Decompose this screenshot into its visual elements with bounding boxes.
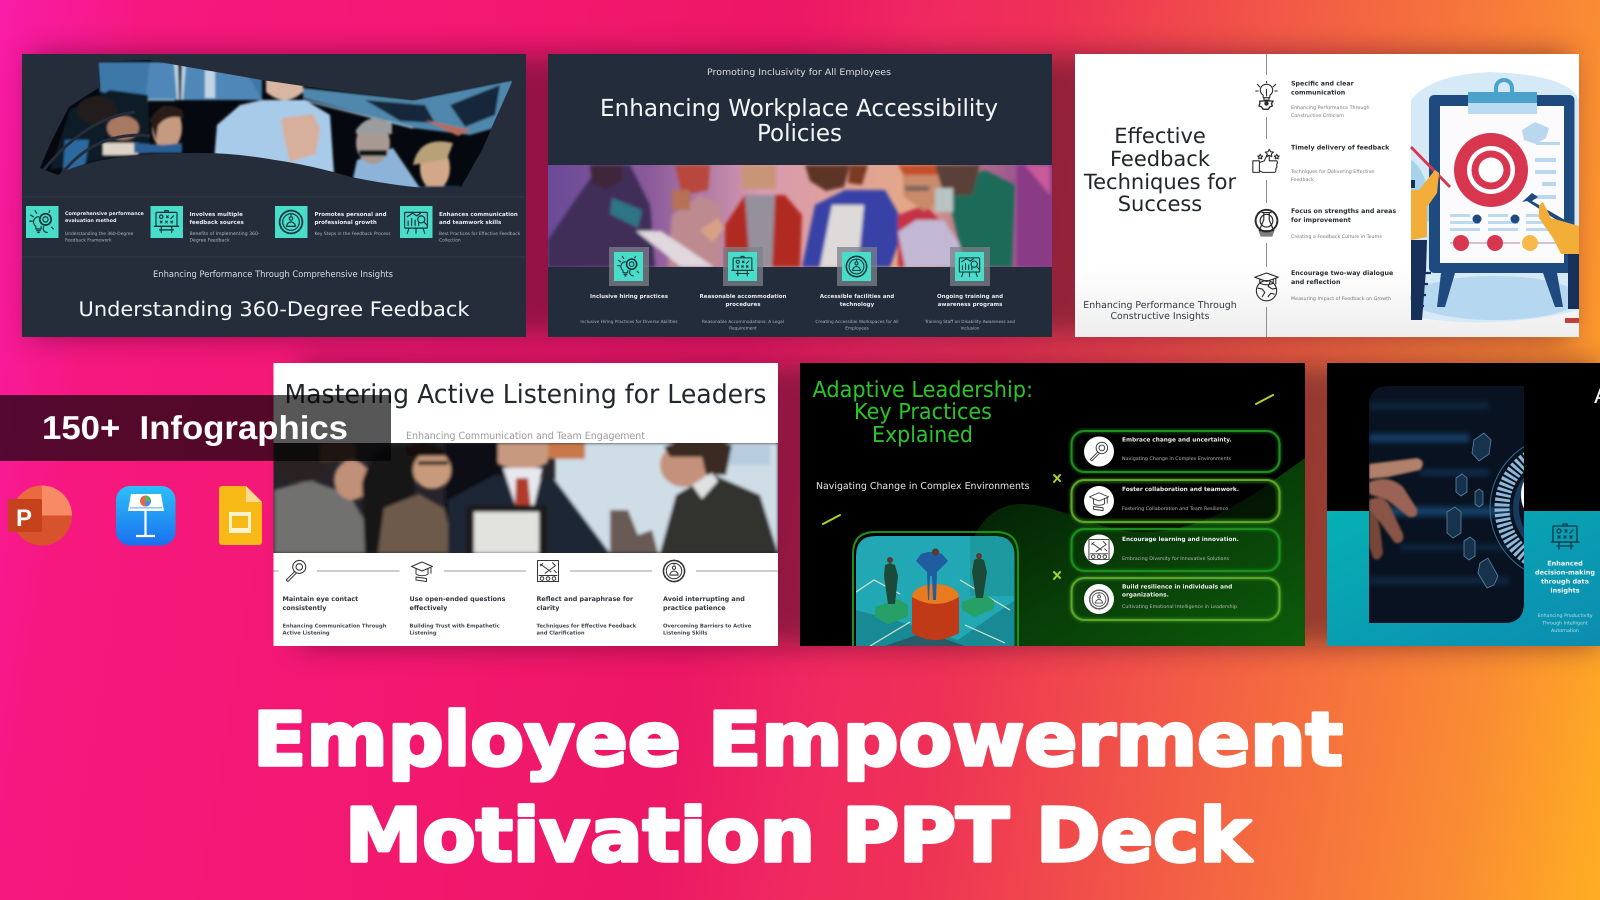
item 4: Avoid interrupting and <box>663 595 745 603</box>
item 2 <box>700 247 787 332</box>
photo: leaders talking <box>272 439 778 555</box>
insight column: Through Intelligent <box>1541 620 1588 626</box>
hand <box>1369 458 1423 560</box>
insight column: through data <box>1541 578 1589 586</box>
item 2: Reasonable Accommodations: A Legal <box>702 319 784 325</box>
item 3 <box>536 560 637 636</box>
pill 3 <box>1072 529 1280 571</box>
slide 3 title: Success <box>1118 192 1202 216</box>
icon: PowerPoint: P <box>16 505 32 532</box>
item 1: Constructive Criticism <box>1291 113 1344 119</box>
item 4: Collection <box>439 238 461 244</box>
slide 5 title <box>812 378 1033 448</box>
banner: 150+ Infographics: 150+ Infographics <box>42 409 348 446</box>
banner: 150+ Infographics <box>0 395 391 461</box>
item 4 <box>1255 270 1393 302</box>
item 3 <box>275 206 391 238</box>
insight column <box>1535 524 1595 634</box>
slide 4: active listening <box>272 363 778 646</box>
main title <box>253 697 1343 879</box>
item 1 <box>26 206 145 244</box>
slide 5: adaptive leadership <box>800 363 1305 646</box>
item 1: Understanding the 360-Degree <box>65 231 134 237</box>
item 1: Active Listening <box>282 630 330 636</box>
pill 1: Navigating Change in Complex Environments <box>1122 456 1231 462</box>
slide 5 title: Key Practices <box>854 400 992 425</box>
technique items <box>1253 80 1396 302</box>
item 3: Promotes personal and <box>314 211 387 218</box>
item 3: Key Steps in the Feedback Process <box>314 231 391 237</box>
slide 1: 360-degree feedback <box>22 54 526 337</box>
item 3: Focus on strengths and areas <box>1291 208 1396 215</box>
photo ribbon <box>40 60 513 188</box>
slide 4 title: Mastering Active Listening for Leaders <box>284 380 766 410</box>
item 4 <box>400 206 521 244</box>
item 3 <box>1256 208 1396 240</box>
item 3: for improvement <box>1291 217 1351 224</box>
pill 3: Embracing Diversity for Innovative Solutions <box>1122 556 1230 562</box>
item 3: Creating a Feedback Culture in Teams <box>1291 234 1382 240</box>
insight column: Automation <box>1551 628 1579 634</box>
hexagon icons <box>1447 433 1498 588</box>
item 1: Feedback Framework <box>65 238 112 244</box>
slide 3 title: Effective <box>1114 124 1206 148</box>
item 4 <box>663 560 752 636</box>
item 4: Enhances communication <box>439 211 518 218</box>
item 2 <box>150 206 260 244</box>
item 4: Measuring Impact of Feedback on Growth <box>1291 296 1391 302</box>
photo: hand and digital wheel <box>1369 386 1524 623</box>
slide 4 subtitle: Enhancing Communication and Team Engagement <box>406 431 645 442</box>
icon: Google Slides <box>219 486 262 545</box>
slide 3 subtitle: Enhancing Performance Through <box>1083 300 1237 311</box>
slide 2 title: Policies <box>757 119 842 147</box>
pill 4: organizations. <box>1122 592 1169 598</box>
item 2: Feedback <box>1291 177 1314 183</box>
accessibility items <box>580 247 1015 332</box>
item 4: awareness programs <box>938 302 1003 308</box>
icon: Keynote <box>116 486 176 546</box>
item 1: communication <box>1291 90 1345 96</box>
item 1 <box>1256 80 1370 119</box>
item 3: professional growth <box>314 219 377 226</box>
slide 6: intelligent automation <box>1327 363 1600 646</box>
pill 3: Encourage learning and innovation. <box>1122 536 1239 543</box>
item 2: Timely delivery of feedback <box>1291 144 1390 152</box>
feedback items row <box>26 206 521 244</box>
pill 4: Cultivating Emotional Intelligence in Leadership <box>1122 604 1237 610</box>
insight column: Enhanced <box>1547 560 1583 568</box>
item 4: Ongoing training and <box>937 293 1003 300</box>
item 2: Degree Feedback <box>190 238 230 244</box>
item 1: Inclusive Hiring Practices for Diverse Abilities <box>580 319 678 325</box>
photo: diverse employees <box>548 165 1052 267</box>
practice pills <box>1072 431 1280 620</box>
pill 1 <box>1072 431 1280 472</box>
item 2: Requirement <box>729 326 757 332</box>
listening items <box>274 560 778 636</box>
item 2 <box>1253 144 1390 183</box>
item 4 <box>924 247 1015 332</box>
slide 3 subtitle: Constructive Insights <box>1111 311 1210 322</box>
item 1: Enhancing Communication Through <box>282 624 387 630</box>
item 4: Inclusion <box>960 326 980 332</box>
item 3: Creating Accessible Workspaces for All <box>815 319 899 325</box>
slide 5 subtitle: Navigating Change in Complex Environments <box>816 481 1030 492</box>
item 2: Reasonable accommodation <box>700 293 787 300</box>
pill 1: Embrace change and uncertainty. <box>1122 436 1232 444</box>
slide 5 title: Explained <box>872 423 973 448</box>
illustration: target on clipboard <box>1410 72 1580 323</box>
main title: Motivation PPT Deck <box>345 793 1253 879</box>
pill 2: Fostering Collaboration and Team Resilience <box>1122 506 1228 512</box>
item 2: procedures <box>726 301 761 308</box>
item 1: evaluation method <box>65 218 117 224</box>
slide 3 title: Techniques for <box>1083 170 1236 194</box>
item 2: Use open-ended questions <box>410 595 506 603</box>
item 4: Overcoming Barriers to Active <box>663 624 752 630</box>
item 4: and reflection <box>1291 279 1340 286</box>
icon: PowerPoint <box>8 486 72 546</box>
slide 5 title: Adaptive Leadership: <box>812 378 1033 403</box>
insight column: Enhancing Productivity <box>1537 613 1593 619</box>
pill 2 <box>1072 480 1280 522</box>
item 3 <box>815 247 899 332</box>
item 1: Enhancing Performance Through <box>1291 105 1370 111</box>
item 1 <box>580 247 678 325</box>
slide 2: workplace accessibility <box>548 54 1052 337</box>
item 3: and Clarification <box>536 630 585 636</box>
item 4: Best Practices for Effective Feedback <box>439 231 521 237</box>
item 1: Comprehensive performance <box>65 211 145 217</box>
decorations <box>823 395 1273 579</box>
slide 3 title <box>1083 124 1236 216</box>
item 3: Accessible facilities and <box>820 293 894 300</box>
slide 3: effective feedback techniques <box>1075 54 1580 337</box>
slide 3 subtitle <box>1083 300 1237 322</box>
slide 2 title: Enhancing Workplace Accessibility <box>600 94 998 122</box>
item 4: Training Staff on Disability Awareness and <box>924 319 1015 325</box>
slide 1 subtitle: Enhancing Performance Through Comprehensive Insights <box>153 270 393 280</box>
item 4: Listening Skills <box>663 630 707 636</box>
item 1: Inclusive hiring practices <box>590 293 669 300</box>
item 1: Specific and clear <box>1291 80 1355 88</box>
slide 1 title: Understanding 360-Degree Feedback <box>78 297 470 321</box>
slide 2 title <box>600 94 998 147</box>
item 2: Building Trust with Empathetic <box>410 624 500 630</box>
slide shadows <box>30 54 1600 646</box>
pill 2: Foster collaboration and teamwork. <box>1122 486 1239 493</box>
pill 4 <box>1072 578 1280 620</box>
insight column: decision-making <box>1535 569 1595 577</box>
item 1: consistently <box>282 604 327 612</box>
item 3: clarity <box>536 604 560 612</box>
item 4: Encourage two-way dialogue <box>1291 270 1393 277</box>
item 3: Techniques for Effective Feedback <box>536 624 637 630</box>
slide 3 title: Feedback <box>1110 147 1211 171</box>
insight column: insights <box>1550 587 1580 595</box>
item 4: and teamwork skills <box>439 219 502 226</box>
item 4: practice patience <box>663 604 726 612</box>
photo: leader on podium <box>853 532 1018 646</box>
item 2: Listening <box>410 630 437 636</box>
item 1 <box>282 560 387 636</box>
item 2: feedback sources <box>190 219 244 226</box>
item 3: Employees <box>845 326 870 332</box>
slide 2 subtitle: Promoting Inclusivity for All Employees <box>707 68 891 78</box>
item 3: Reflect and paraphrase for <box>536 595 634 603</box>
item 2: Techniques for Delivering Effective <box>1290 169 1374 175</box>
item 2: effectively <box>410 604 448 612</box>
main title: Employee Empowerment <box>253 697 1343 783</box>
pill 4: Build resilience in individuals and <box>1122 584 1232 591</box>
wheel <box>1490 446 1524 570</box>
item 2: Benefits of Implementing 360- <box>190 231 260 237</box>
item 1: Maintain eye contact <box>282 595 358 603</box>
item 2 <box>410 562 506 636</box>
item 3: technology <box>840 301 875 308</box>
item 2: Involves multiple <box>190 211 243 218</box>
